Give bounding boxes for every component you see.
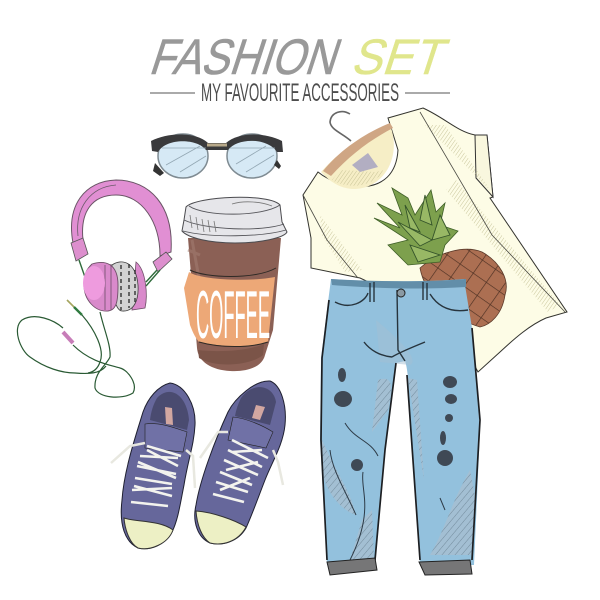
tag	[352, 153, 378, 172]
text: COFFEE	[196, 277, 270, 353]
jeans	[320, 279, 480, 575]
icon: sneakers	[111, 381, 285, 549]
hatching panels	[322, 378, 476, 560]
pineapple	[374, 188, 506, 327]
hanger hook	[330, 112, 351, 141]
t-shirt with hanger	[303, 108, 567, 372]
right sneaker	[195, 381, 285, 544]
headband	[72, 180, 171, 256]
rips	[334, 368, 457, 471]
sleeve	[184, 272, 275, 346]
denim body	[320, 279, 480, 565]
sliders	[71, 238, 88, 261]
outlines	[321, 300, 480, 560]
seam lines	[303, 112, 565, 312]
shirt body	[303, 108, 567, 372]
neck inside	[321, 125, 394, 189]
rolled cuffs	[327, 558, 377, 575]
icon: glasses	[151, 134, 283, 178]
icon: headphones	[17, 180, 172, 397]
title: FASHION	[145, 29, 349, 85]
leaves	[374, 188, 458, 265]
cup body	[188, 238, 281, 371]
subtitle with rules: MY FAVOURITE ACCESSORIES	[201, 79, 399, 107]
pockets and fly	[335, 282, 468, 361]
hatching	[320, 125, 560, 312]
fruit	[420, 249, 506, 327]
cable	[17, 312, 134, 397]
left sneaker	[111, 383, 195, 549]
icon: coffee cup	[182, 197, 287, 371]
hanger bar	[323, 123, 393, 176]
lid	[182, 197, 287, 243]
title: SET	[347, 29, 455, 85]
sleeve right	[475, 135, 493, 197]
ear cups	[132, 262, 146, 310]
waistband	[331, 279, 466, 288]
